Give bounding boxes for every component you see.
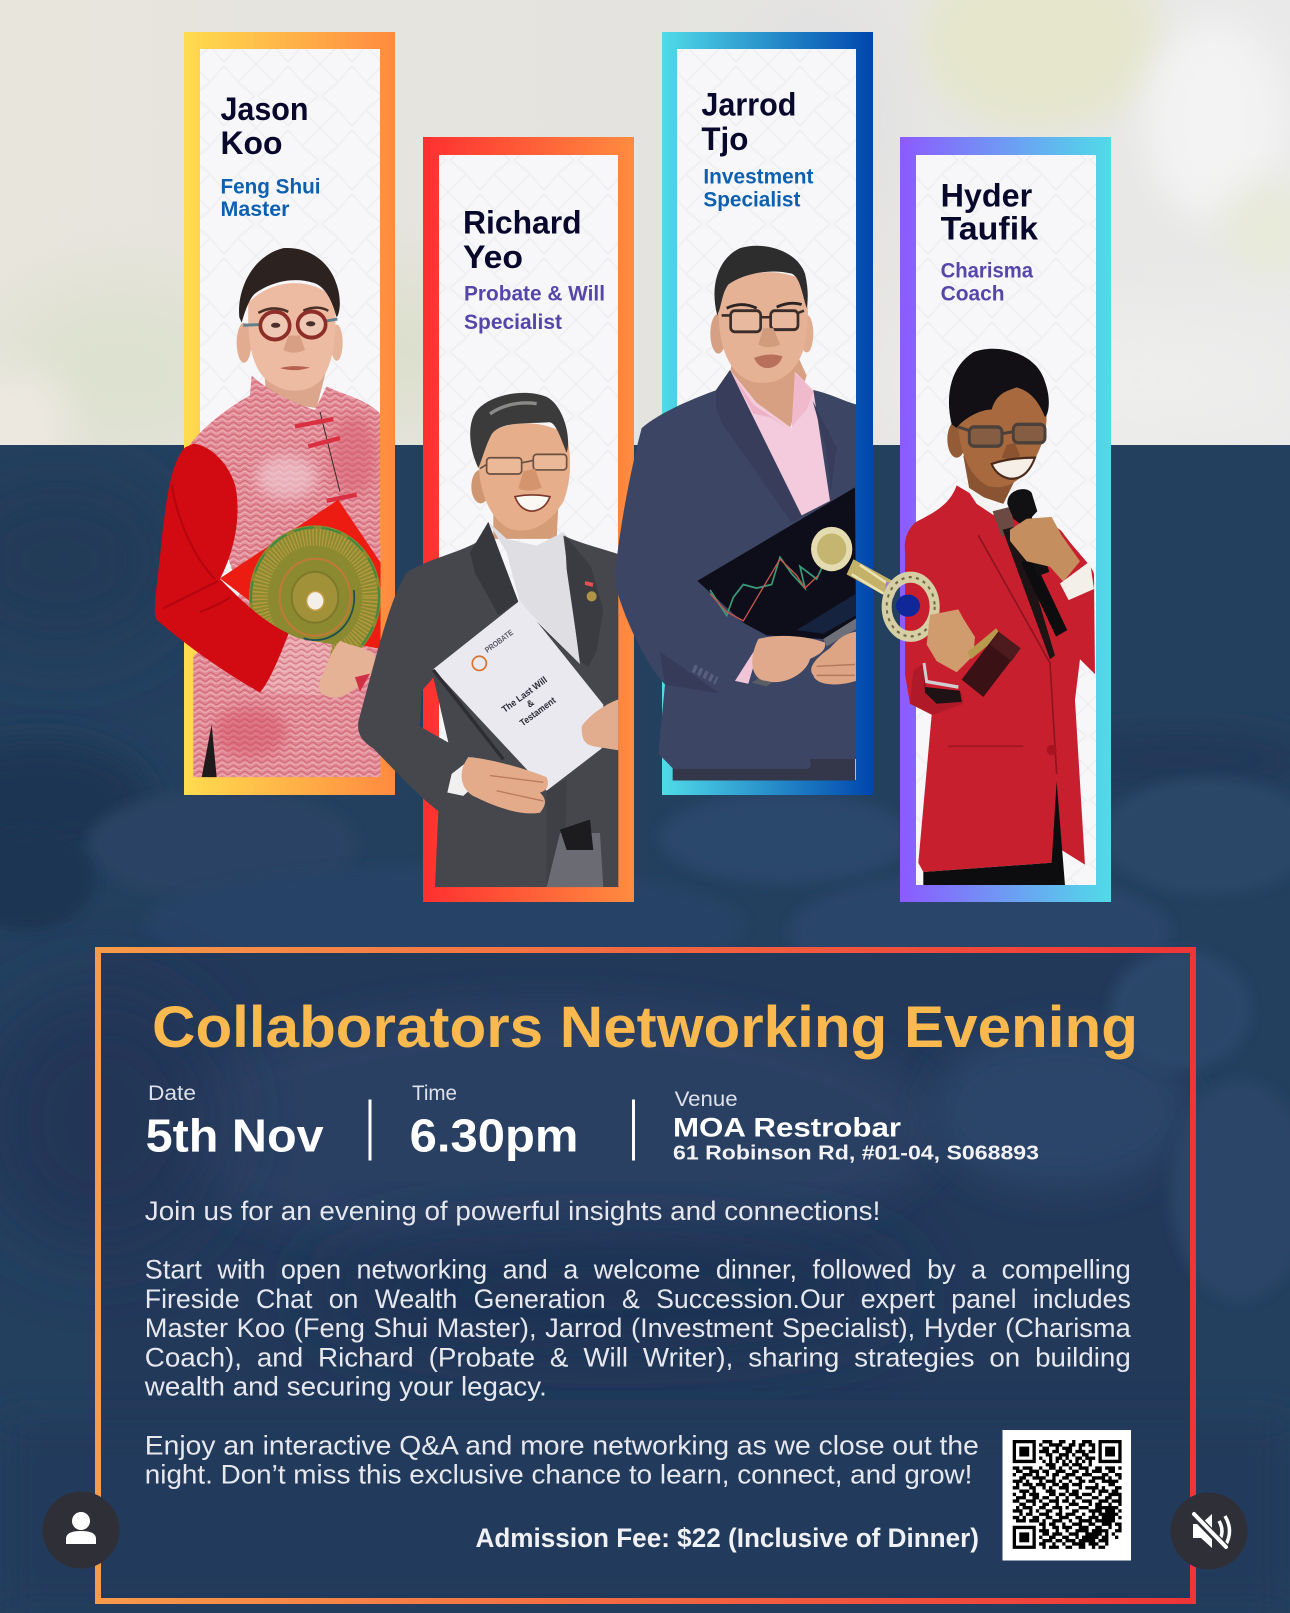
background: navy coins bottom: [0, 756, 1290, 1391]
time block: [410, 1082, 578, 1162]
role: Feng Shui Master: [220, 176, 320, 221]
role: Feng Shui Master: Feng Shui: [220, 176, 320, 198]
time block: Time: [412, 1082, 457, 1105]
description text: [144, 1254, 1132, 1402]
name: Hyder Taufik: [941, 178, 1038, 246]
time block: 6.30pm: [410, 1110, 578, 1162]
date block: Date: [148, 1082, 196, 1105]
panel: Jarrod Tjo: [615, 32, 873, 795]
date block: 5th Nov: [146, 1110, 324, 1162]
button: profile icon: [42, 1492, 120, 1568]
panel: event details: [98, 950, 1193, 1601]
frame: cyan-blue: [662, 32, 873, 795]
heading: Collaborators Networking Evening: [152, 995, 1138, 1060]
name: Richard Yeo: [463, 204, 582, 275]
qr code: [1002, 1430, 1131, 1560]
panel: Hyder Taufik: [811, 137, 1111, 902]
name: Richard Yeo: Richard: [463, 204, 582, 240]
role: Charisma Coach: [941, 260, 1033, 305]
background: pale marble top: [0, 0, 1290, 470]
venue block: [673, 1088, 1039, 1165]
role: Probate & Will Specialist: Specialist: [464, 311, 562, 334]
closing text: night. Don’t miss this exclusive chance to learn, connect, and grow!: [145, 1460, 972, 1490]
portrait: Jason Koo with compass: [190, 248, 381, 777]
frame: red-orange: [423, 137, 634, 902]
closing text: [145, 1430, 979, 1490]
sleeve: red velvet: [155, 444, 289, 692]
role: Feng Shui Master: Master: [220, 198, 290, 221]
name: Jarrod Tjo: Tjo: [701, 121, 748, 157]
description text: Coach), and Richard (Probate & Will Writer), sharing strategies on building: [145, 1342, 1131, 1372]
description text: Master Koo (Feng Shui Master), Jarrod (Investment Specialist), Hyder (Charisma: [145, 1313, 1132, 1343]
button: mute icon: [1170, 1492, 1248, 1570]
portrait: Richard Yeo with will folder: &: [524, 696, 536, 710]
portrait: Hyder Taufik with microphone: [811, 349, 1095, 885]
venue block: MOA Restrobar: [673, 1112, 902, 1142]
frame: purple-cyan: [900, 137, 1111, 902]
role: Investment Specialist: Specialist: [703, 188, 800, 211]
panel: Richard Yeo: [358, 137, 634, 902]
panel: Jason Koo: [155, 32, 395, 795]
intro text: Join us for an evening of powerful insights and connections!: [145, 1196, 880, 1226]
description text: Start with open networking and a welcome dinner, followed by a compelling: [145, 1254, 1131, 1284]
name: Jason Koo: Jason: [220, 91, 308, 127]
role: Charisma Coach: Charisma: [941, 260, 1033, 283]
description text: Fireside Chat on Wealth Generation & Succession.Our expert panel includes: [145, 1284, 1131, 1314]
venue block: 61 Robinson Rd, #01-04, S068893: [673, 1143, 1039, 1165]
panel border: [98, 950, 1193, 1601]
name: Hyder Taufik: Taufik: [941, 210, 1038, 246]
portrait: Richard Yeo with will folder: PROBATE: [483, 628, 515, 655]
role: Charisma Coach: Coach: [941, 282, 1005, 305]
role: Probate & Will Specialist: Probate & Will: [464, 283, 605, 306]
name: Jason Koo: [220, 91, 308, 161]
closing text: Enjoy an interactive Q&A and more networking as we close out the: [145, 1430, 979, 1460]
portrait: Richard Yeo with will folder: Testament: [517, 694, 558, 728]
role: Probate & Will Specialist: [464, 283, 605, 334]
admission fee: Admission Fee: $22 (Inclusive of Dinner): [476, 1523, 979, 1553]
portrait: Richard Yeo with will folder: The Last Will: [499, 674, 549, 715]
role: Investment Specialist: Investment: [703, 165, 813, 188]
role: Investment Specialist: [703, 165, 813, 211]
name: Jason Koo: Koo: [220, 125, 282, 161]
venue block: Venue: [675, 1088, 738, 1111]
portrait: Richard Yeo with will folder: [358, 393, 618, 887]
name: Hyder Taufik: Hyder: [941, 178, 1032, 214]
name: Jarrod Tjo: Jarrod: [701, 87, 796, 123]
name: Jarrod Tjo: [701, 87, 796, 157]
description text: wealth and securing your legacy.: [144, 1372, 547, 1402]
name: Richard Yeo: Yeo: [463, 239, 523, 275]
frame: yellow-orange: [184, 32, 395, 795]
date block: [146, 1082, 324, 1162]
portrait: Jarrod Tjo with tablet: [615, 246, 857, 780]
